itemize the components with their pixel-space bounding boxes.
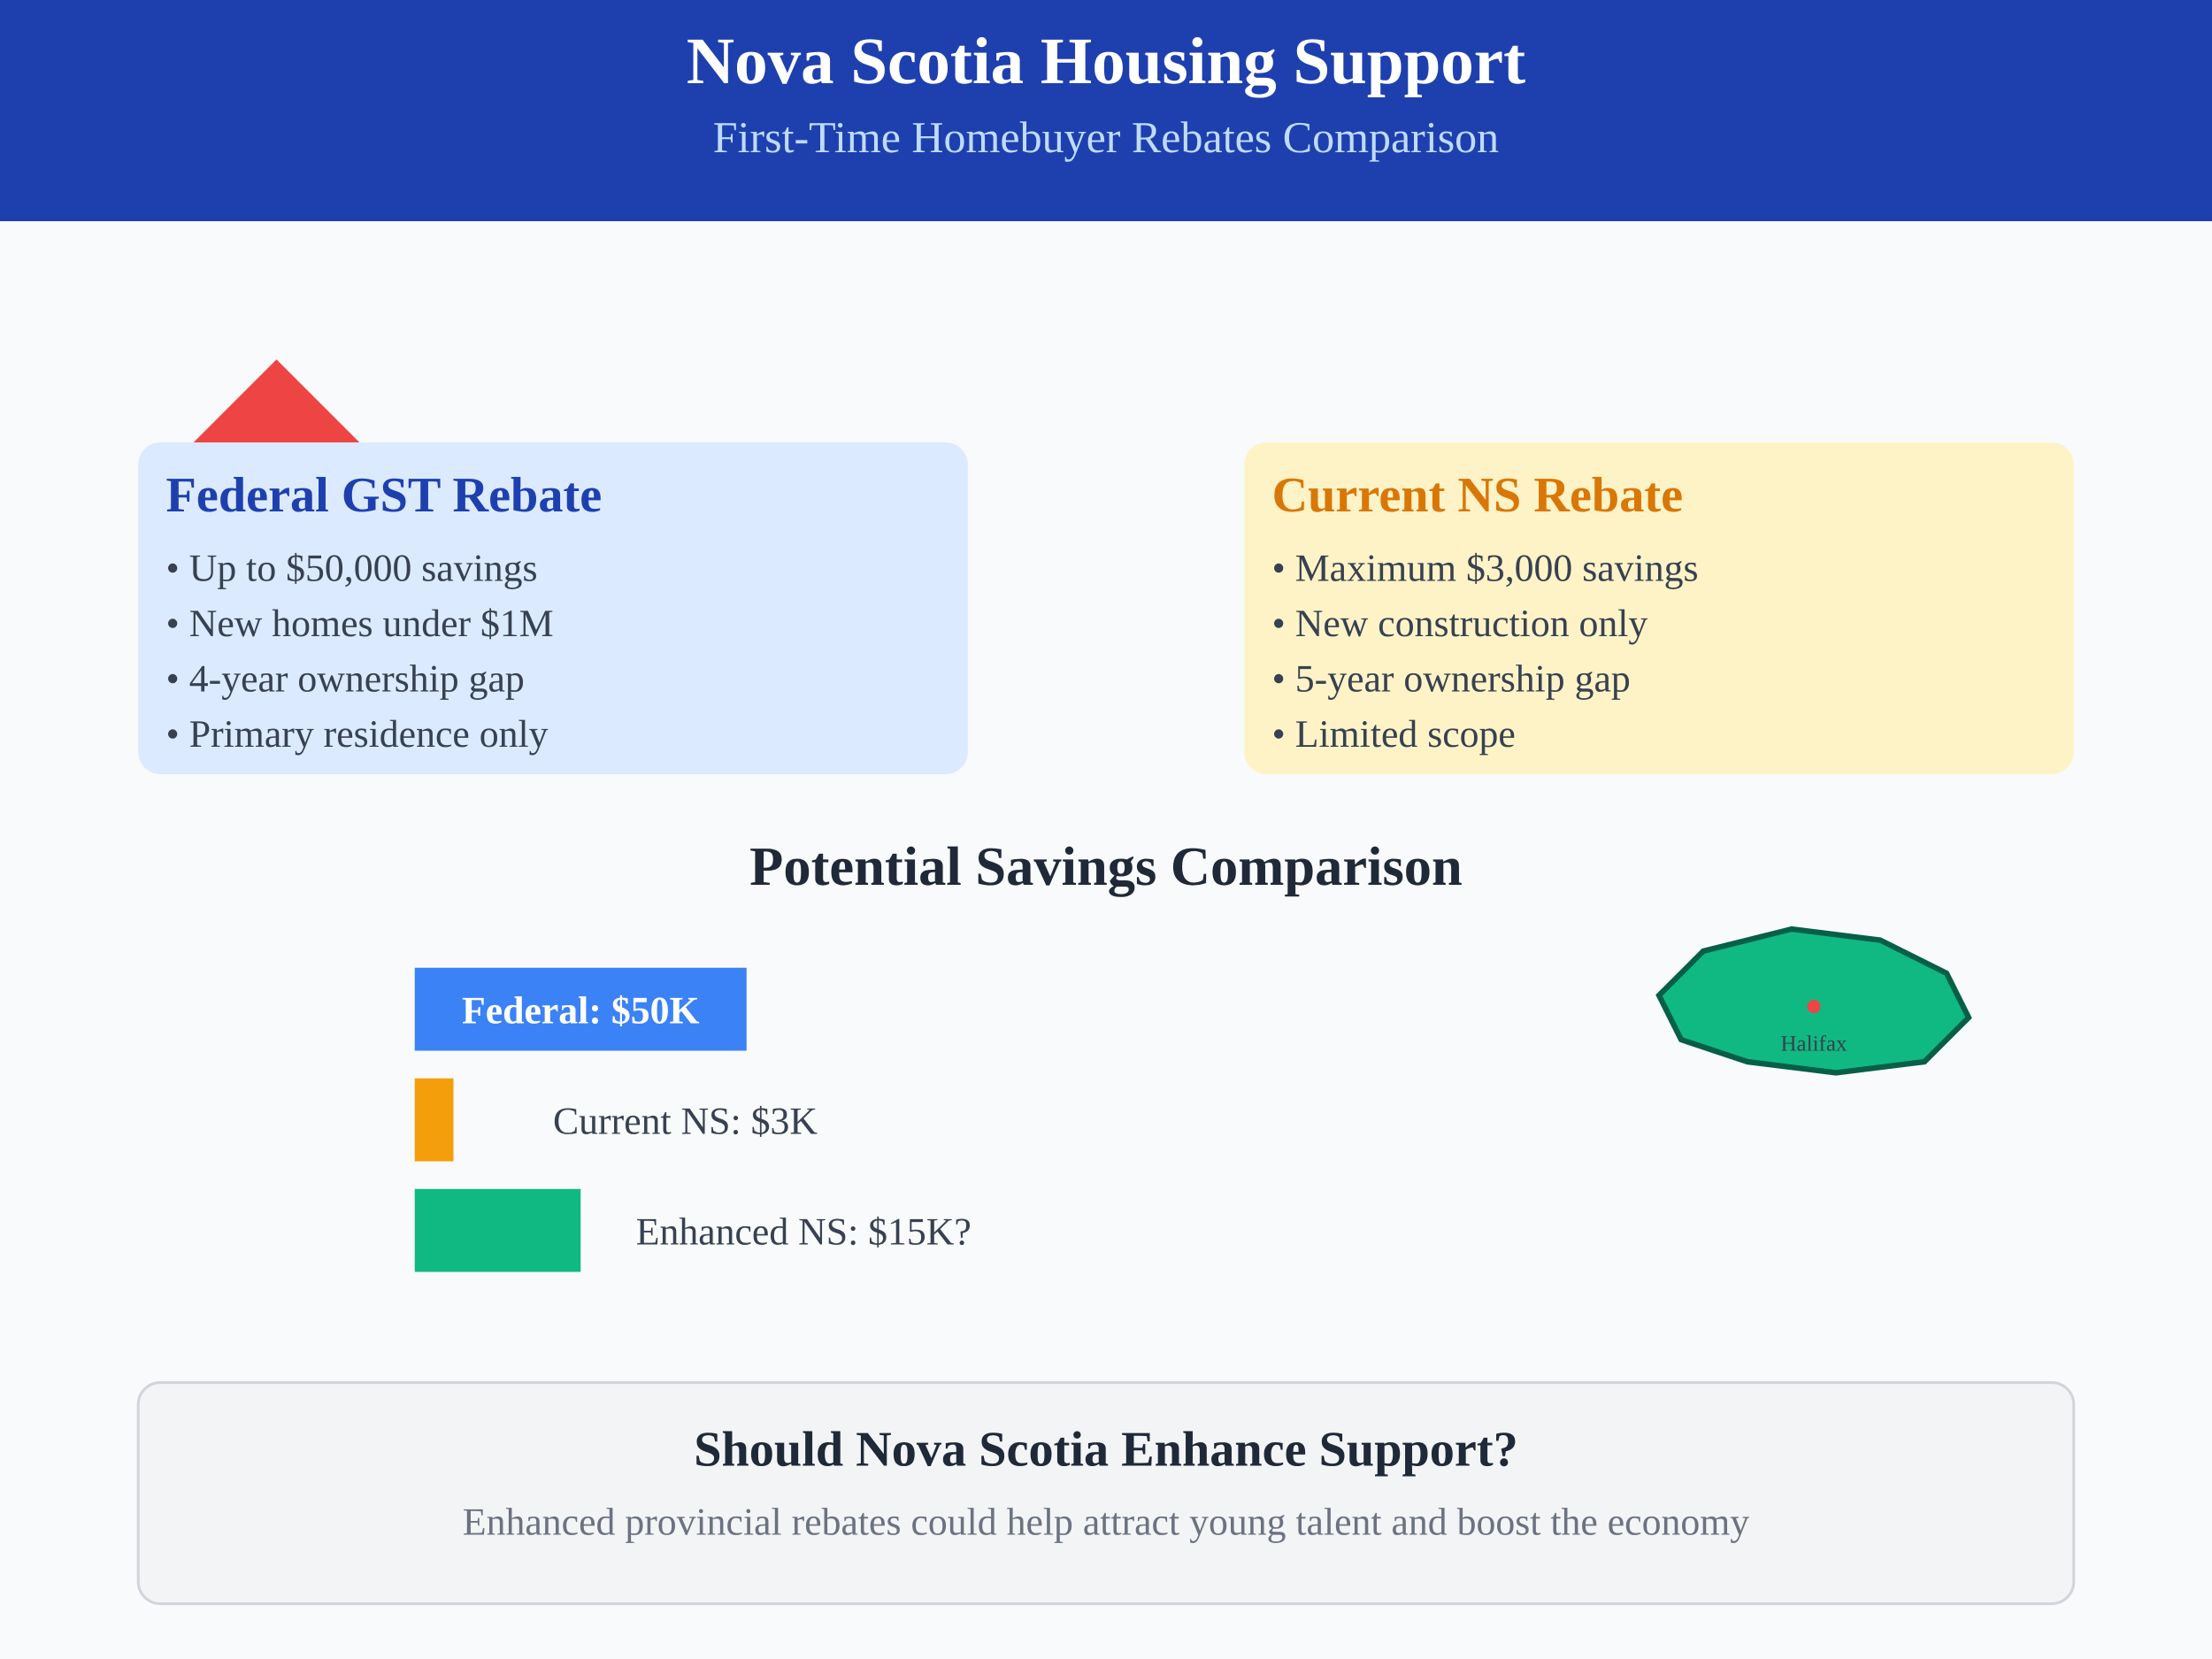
bar chart: potential savings xyxy=(415,968,972,1272)
panel: federal GST rebate xyxy=(138,442,968,774)
Halifax label: Halifax xyxy=(1780,1032,1847,1056)
federal panel bullet list xyxy=(166,550,555,757)
bar: federal xyxy=(415,968,747,1051)
panel: call to action xyxy=(138,1382,2074,1603)
NS panel bullet list xyxy=(1272,550,1698,757)
NS panel bullet list: • New construction only xyxy=(1272,605,1647,647)
panel: current NS rebate xyxy=(1244,442,2074,774)
bar: current NS xyxy=(415,1079,818,1161)
federal panel heading: Federal GST Rebate xyxy=(166,467,602,523)
bar: federal: Federal: $50K xyxy=(462,993,700,1034)
NS panel bullet list: • Limited scope xyxy=(1272,716,1516,757)
NS panel heading: Current NS Rebate xyxy=(1272,467,1683,523)
icon: house roof xyxy=(166,359,388,470)
call to action text: Enhanced provincial rebates could help attract young talent and boost the economy xyxy=(463,1504,1749,1546)
header banner xyxy=(0,0,2212,221)
federal panel bullet list: • 4-year ownership gap xyxy=(166,661,525,703)
NS panel bullet list: • 5-year ownership gap xyxy=(1272,661,1631,703)
savings comparison heading: Potential Savings Comparison xyxy=(749,838,1463,899)
call to action heading: Should Nova Scotia Enhance Support? xyxy=(694,1421,1518,1477)
federal panel bullet list: • Primary residence only xyxy=(166,716,549,757)
title: Nova Scotia Housing Support xyxy=(687,27,1525,99)
bar: enhanced NS: Enhanced NS: $15K? xyxy=(636,1214,972,1256)
bar: enhanced NS xyxy=(415,1189,972,1272)
NS panel bullet list: • Maximum $3,000 savings xyxy=(1272,550,1698,592)
federal panel bullet list: • Up to $50,000 savings xyxy=(166,550,538,592)
subtitle: First-Time Homebuyer Rebates Comparison xyxy=(713,116,1499,163)
Halifax marker xyxy=(1807,1000,1821,1013)
map outline xyxy=(1659,929,1969,1072)
bar: current NS: Current NS: $3K xyxy=(553,1103,818,1145)
map: Nova Scotia with Halifax xyxy=(1659,929,1969,1072)
federal panel bullet list: • New homes under $1M xyxy=(166,605,555,647)
